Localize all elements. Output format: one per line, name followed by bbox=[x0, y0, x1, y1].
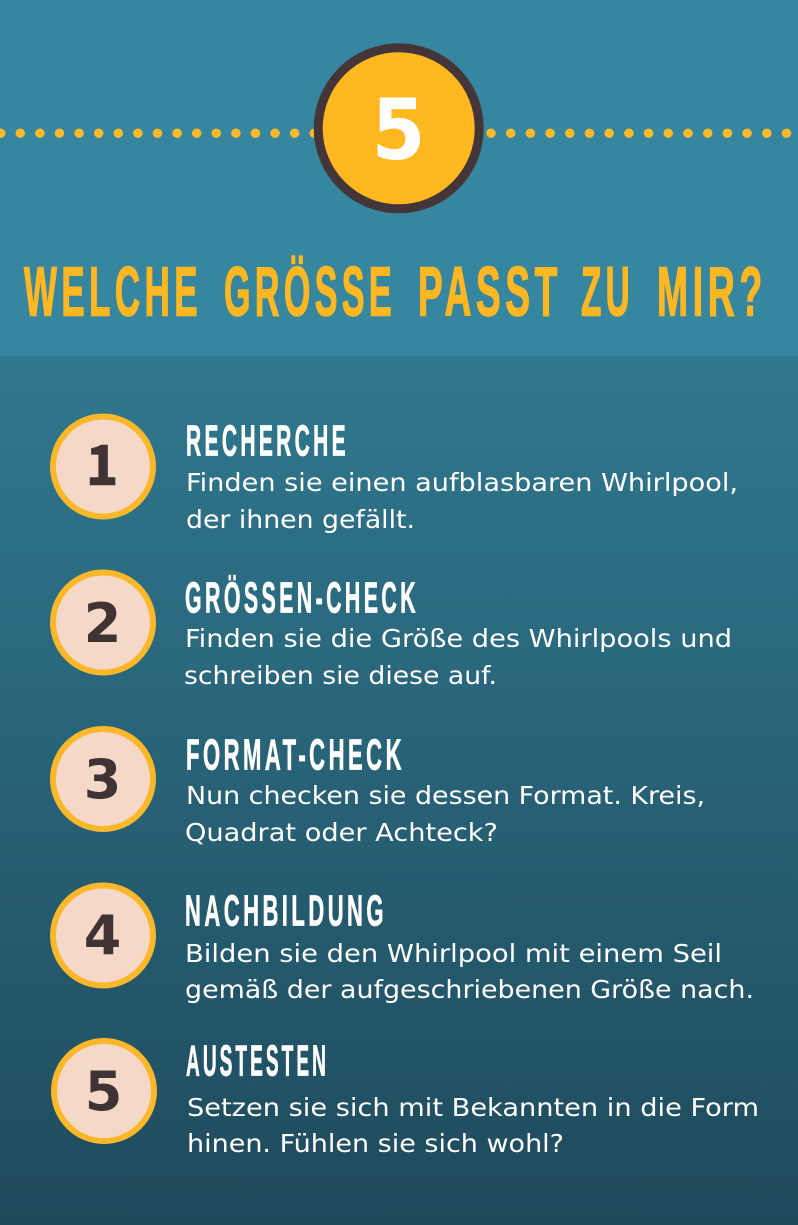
panel: step 5: AUSTESTEN bbox=[186, 1036, 329, 1086]
panel: step 2: GRÖSSEN-CHECK bbox=[185, 574, 419, 622]
icon: number 5 bbox=[54, 1041, 154, 1141]
icon: number 4: 4 bbox=[84, 904, 121, 967]
icon: number 3 bbox=[53, 729, 153, 829]
text block: step 5 bbox=[187, 1093, 759, 1158]
panel: step 5 bbox=[54, 1036, 759, 1158]
icon: number 3: 3 bbox=[84, 748, 121, 811]
text block: step 2: Finden sie die Größe des Whirlpools und bbox=[185, 624, 732, 653]
panel: header background bbox=[0, 0, 798, 356]
text block: step 3: Nun checken sie dessen Format. Kreis, bbox=[186, 781, 705, 810]
dotted line bbox=[1, 128, 790, 138]
text block: step 4 bbox=[185, 939, 754, 1004]
text block: step 4: gemäß der aufgeschriebenen Größe nach. bbox=[185, 975, 754, 1004]
panel: step 3 bbox=[53, 729, 705, 847]
text block: step 2: schreiben sie diese auf. bbox=[184, 661, 497, 690]
panel: steps background bbox=[0, 356, 798, 1225]
icon: number 2 bbox=[53, 572, 153, 672]
text block: step 5: hinen. Fühlen sie sich wohl? bbox=[187, 1129, 564, 1158]
icon: number 1 bbox=[53, 416, 153, 516]
panel: step 1: RECHERCHE bbox=[186, 416, 349, 466]
badge: number 5 bbox=[318, 48, 479, 209]
panel: step 1 bbox=[53, 416, 738, 534]
icon: number 4 bbox=[53, 886, 153, 986]
text block: step 2 bbox=[184, 624, 732, 690]
title bbox=[24, 252, 767, 330]
icon: number 1: 1 bbox=[86, 422, 118, 500]
title: GRÖSSE bbox=[224, 252, 396, 330]
panel: step 4: NACHBILDUNG bbox=[185, 886, 387, 936]
text block: step 1: der ihnen gefällt. bbox=[186, 505, 415, 534]
title: PASST bbox=[418, 252, 562, 330]
icon: number 5: 5 bbox=[85, 1060, 122, 1123]
badge: number 5: 5 bbox=[372, 82, 425, 180]
text block: step 1: Finden sie einen aufblasbaren Whirlpool, bbox=[186, 468, 738, 497]
text block: step 5: Setzen sie sich mit Bekannten in die Form bbox=[187, 1093, 759, 1122]
panel: step 4 bbox=[53, 886, 754, 1004]
heading: Format-Check: FORMAT-CHECK bbox=[186, 730, 405, 780]
text block: step 1 bbox=[186, 468, 738, 534]
title: WELCHE bbox=[24, 252, 202, 330]
icon: number 2: 2 bbox=[84, 592, 121, 655]
title: ZU bbox=[581, 252, 634, 330]
text block: step 3 bbox=[185, 781, 705, 847]
text block: step 3: Quadrat oder Achteck? bbox=[185, 818, 498, 847]
panel: step 2 bbox=[53, 572, 732, 690]
text block: step 4: Bilden sie den Whirlpool mit einem Seil bbox=[185, 939, 722, 968]
